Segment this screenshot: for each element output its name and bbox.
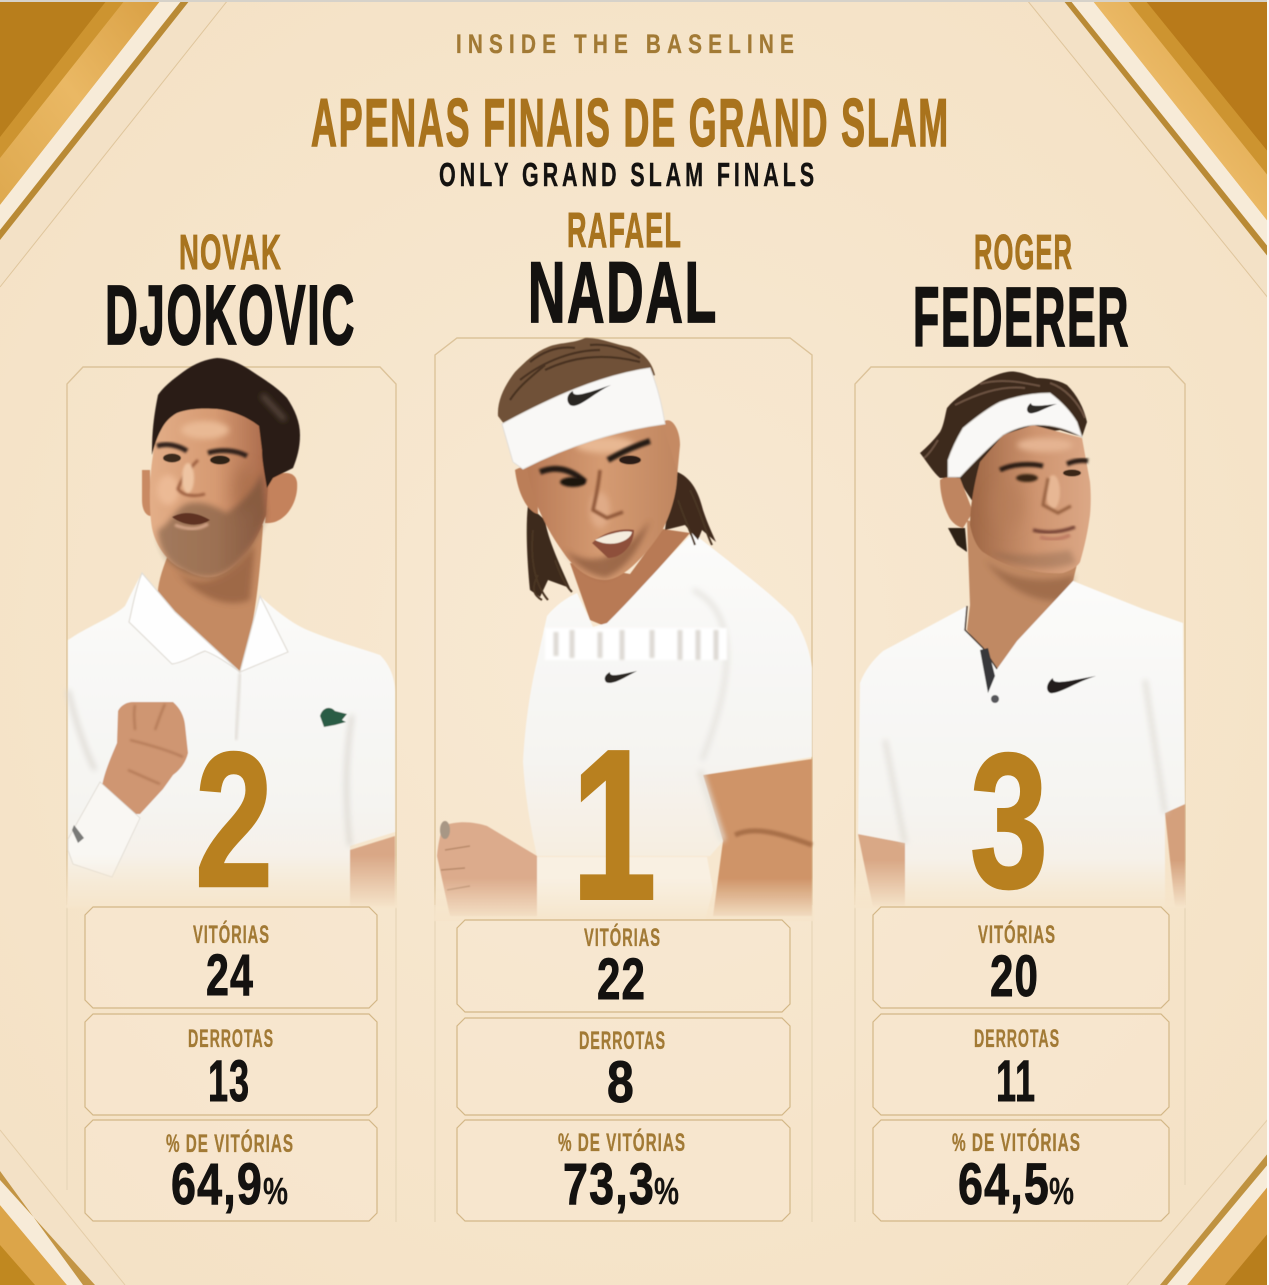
panel: Rafael Nadal	[434, 204, 814, 1222]
player name: Roger Federer	[913, 226, 1130, 364]
stat: win percentage	[873, 1120, 1169, 1221]
stat: wins: VITÓRIAS	[978, 919, 1056, 949]
rank number: 2	[195, 712, 273, 927]
stat: losses: DERROTAS	[974, 1025, 1060, 1053]
panel: Roger Federer	[854, 226, 1186, 1222]
corner decoration: bottom right	[1127, 1118, 1269, 1285]
stat: win percentage: 64,9	[171, 1152, 263, 1217]
player name: Rafael Nadal	[528, 204, 718, 341]
card frame	[67, 367, 396, 905]
stat: win percentage: % DE VITÓRIAS	[952, 1127, 1081, 1157]
icon: headband swoosh	[1027, 403, 1057, 413]
corner decoration: bottom left	[0, 1130, 125, 1285]
icon: headband swoosh	[567, 385, 611, 406]
panel: Novak Djokovic	[66, 226, 398, 1222]
stat: win percentage: %	[654, 1171, 679, 1213]
stat: win percentage: %	[263, 1171, 288, 1213]
card frame	[855, 367, 1185, 905]
stat: win percentage: 73,3	[563, 1152, 655, 1217]
corner decoration: top right	[1027, 0, 1269, 299]
stat: win percentage	[457, 1120, 790, 1221]
player name: Rafael Nadal: RAFAEL	[567, 204, 682, 258]
portrait: Djokovic	[66, 358, 398, 908]
stat: wins: 20	[990, 944, 1039, 1009]
stat: win percentage: %	[1049, 1171, 1074, 1213]
watermark smear	[545, 628, 727, 660]
player name: Novak Djokovic: DJOKOVIC	[105, 268, 356, 362]
rank number: 1	[572, 706, 656, 943]
corner decoration: top left	[0, 0, 228, 287]
rank number: 3	[970, 713, 1048, 928]
subtitle: ONLY GRAND SLAM FINALS	[439, 156, 818, 193]
player name: Rafael Nadal: NADAL	[528, 245, 718, 341]
portrait: Federer	[854, 372, 1186, 908]
stat: win percentage	[85, 1120, 377, 1221]
stat: losses: DERROTAS	[579, 1027, 666, 1055]
stat: losses	[873, 1014, 1169, 1115]
stat: win percentage: % DE VITÓRIAS	[166, 1128, 294, 1158]
icon: headband	[502, 368, 665, 469]
stat: losses: DERROTAS	[188, 1025, 274, 1053]
stat: wins: 22	[597, 947, 646, 1012]
icon: chest swoosh	[1047, 676, 1096, 693]
portrait: Nadal	[434, 338, 814, 921]
icon: crocodile logo	[320, 708, 347, 727]
stat: losses	[85, 1014, 377, 1115]
stat: win percentage: 64,5	[958, 1152, 1050, 1217]
stat: wins: VITÓRIAS	[193, 919, 270, 949]
stat: losses: 11	[996, 1049, 1036, 1114]
icon: chest swoosh	[605, 671, 637, 683]
stat: wins	[85, 907, 377, 1008]
kicker: INSIDE THE BASELINE	[456, 29, 800, 59]
stat: losses	[457, 1018, 790, 1115]
icon: headband	[948, 393, 1082, 477]
stat: wins: 24	[206, 943, 254, 1008]
card frame	[435, 338, 812, 905]
icon: shirt placket	[980, 648, 995, 693]
player name: Novak Djokovic	[105, 226, 356, 362]
stat: wins	[457, 920, 790, 1012]
stat: losses: 8	[607, 1050, 635, 1115]
player name: Novak Djokovic: NOVAK	[179, 226, 282, 280]
player name: Roger Federer: ROGER	[974, 226, 1073, 280]
stat: wins	[873, 907, 1169, 1009]
stat: win percentage: % DE VITÓRIAS	[558, 1127, 686, 1157]
stat: losses: 13	[208, 1049, 250, 1114]
stat: wins: VITÓRIAS	[584, 922, 661, 952]
